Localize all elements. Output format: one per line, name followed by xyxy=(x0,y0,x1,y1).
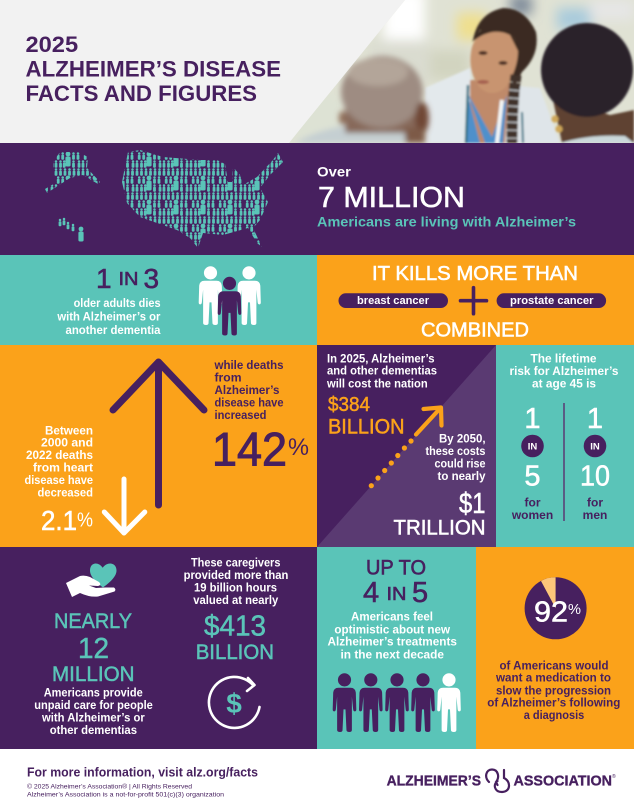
footer: more information: For more information, visit alz.org/facts xyxy=(27,765,258,780)
text: deaths increased: increased xyxy=(214,408,266,422)
text: caregiver hours xyxy=(184,556,288,607)
stat: 1 in 3: 1 xyxy=(96,263,112,294)
stat: nearly 12 million xyxy=(52,610,134,686)
title xyxy=(26,32,281,106)
icon: US map made of people xyxy=(45,150,283,248)
panel: 7 million Americans xyxy=(0,143,634,255)
stat: $1 trillion: TRILLION xyxy=(394,516,486,539)
text: heart disease decreased xyxy=(24,423,93,499)
pill: breast cancer xyxy=(338,293,448,308)
text: unpaid care: with Alzheimer’s or xyxy=(41,711,145,725)
title: FACTS AND FIGURES xyxy=(26,81,257,106)
text: want medication: want a medication to xyxy=(495,671,611,685)
face xyxy=(470,27,518,93)
text: 2050 cost xyxy=(426,431,486,483)
text: deaths increased: while deaths xyxy=(214,358,284,372)
text: want medication: of Alzheimer’s following xyxy=(487,696,620,710)
text: 2050 cost: to nearly xyxy=(438,469,486,483)
stat text: Over xyxy=(317,164,352,180)
chart: 92% pie: 92 xyxy=(534,597,568,629)
text: 2050 cost: these costs xyxy=(426,444,486,458)
stat: up to 4 in 5: 4 xyxy=(363,577,379,609)
panel: medication xyxy=(476,547,634,749)
icon: three people xyxy=(199,266,261,336)
text: unpaid care: other dementias xyxy=(50,723,137,737)
stat text: 7 MILLION xyxy=(318,182,465,214)
stat: 1 in 5 for women xyxy=(511,403,553,522)
stat: up to 4 in 5 xyxy=(363,556,428,609)
stat: nearly 12 million: NEARLY xyxy=(54,610,132,633)
stat: 1 in 10 for men: 1 xyxy=(587,403,603,435)
stat: 1 in 3: IN xyxy=(118,269,138,289)
text: caregiver hours: These caregivers xyxy=(191,556,281,570)
stat: up to 4 in 5: 5 xyxy=(412,577,428,609)
stat: $1 trillion: $1 xyxy=(459,488,486,520)
text: caregiver hours: valued at nearly xyxy=(193,593,279,607)
description: older adults dies xyxy=(74,296,161,310)
panel: it kills more than: IT KILLS MORE THAN xyxy=(372,263,578,285)
panel: cost xyxy=(317,345,496,547)
stat: $384 billion: $384 xyxy=(328,394,370,416)
description: with Alzheimer’s or xyxy=(56,310,161,324)
stat: 1 in 5 for women: women xyxy=(511,508,553,522)
stat: 142%: % xyxy=(288,434,309,461)
stat: 2.1%: 2.1 xyxy=(41,505,77,536)
stat: 1 in 10 for men: men xyxy=(583,508,607,522)
text: deaths increased: from xyxy=(214,371,242,385)
footer: more information: Alzheimer’s Association is a not-for-profit 501(c)(3) organization xyxy=(27,792,224,799)
arrow: down xyxy=(104,479,145,533)
chart: 92% pie xyxy=(525,577,587,639)
logo: Alzheimer's Association: ® xyxy=(612,773,616,780)
stat: nearly 12 million: 12 xyxy=(78,633,109,665)
text: lifetime risk: at age 45 is xyxy=(532,377,596,391)
stat: $384 billion xyxy=(328,394,404,438)
stat: up to 4 in 5: IN xyxy=(386,584,406,604)
logo: Alzheimer's Association: ALZHEIMER’S xyxy=(387,773,481,790)
text: deaths increased: disease have xyxy=(214,396,284,410)
text: optimistic: in the next decade xyxy=(340,647,444,661)
stat: 1 in 10 for men: 10 xyxy=(580,461,610,493)
text: 2025 cost: and other dementias xyxy=(327,364,437,378)
header background xyxy=(0,0,634,143)
text: want medication xyxy=(487,658,620,722)
text: lifetime risk xyxy=(510,351,619,391)
text: want medication: a diagnosis xyxy=(524,708,585,722)
text: deaths increased xyxy=(214,358,284,422)
description: another dementia xyxy=(66,323,161,337)
icon: dollar cycle xyxy=(209,677,260,728)
stat: 1 in 10 for men xyxy=(580,403,610,522)
panel: it kills more than xyxy=(317,255,634,345)
pill: breast cancer: breast cancer xyxy=(357,295,430,307)
description xyxy=(56,296,161,337)
text: 2025 cost: In 2025, Alzheimer’s xyxy=(327,351,435,365)
logo: Alzheimer's Association: ASSOCIATION xyxy=(514,773,612,790)
panel: caregivers xyxy=(0,547,317,749)
stat: 1 in 3 xyxy=(96,263,159,294)
text: unpaid care xyxy=(34,686,153,737)
text: 2025 cost xyxy=(326,351,437,390)
text: heart disease decreased: from heart xyxy=(33,461,93,475)
stat: $384 billion: BILLION xyxy=(328,415,404,438)
text: optimistic: optimistic about new xyxy=(334,622,451,636)
text: unpaid care: Americans provide xyxy=(44,686,143,700)
coat xyxy=(425,68,478,143)
stat: $1 trillion xyxy=(394,488,486,539)
text: 2050 cost: By 2050, xyxy=(439,431,486,445)
icon: five people xyxy=(333,673,461,732)
text: unpaid care: unpaid care for people xyxy=(34,698,153,712)
stat: 1 in 3: 3 xyxy=(144,263,159,294)
photo: doctor talking with patients xyxy=(280,0,634,143)
stat text xyxy=(317,164,576,230)
footer: more information: © 2025 Alzheimer’s Association® | All Rights Reserved xyxy=(27,783,192,791)
text: optimistic xyxy=(328,610,457,661)
icon: plus xyxy=(460,288,486,314)
arrow: up xyxy=(113,362,204,505)
pill: prostate cancer: prostate cancer xyxy=(510,295,594,307)
text: heart disease decreased: Between xyxy=(45,423,93,437)
stat: 2.1%: % xyxy=(77,510,93,532)
text: caregiver hours: provided more than xyxy=(184,568,288,582)
title: ALZHEIMER’S DISEASE xyxy=(26,57,281,82)
icon: hand holding heart xyxy=(66,563,116,597)
chart: 92% pie: % xyxy=(568,601,581,618)
stat: $413 billion xyxy=(196,611,274,664)
stat: 1 in 5 for women: for xyxy=(524,496,541,510)
stat: $413 billion: BILLION xyxy=(196,641,274,664)
stat: up to 4 in 5: UP TO xyxy=(366,556,426,579)
text: deaths increased: Alzheimer’s xyxy=(214,383,280,397)
stat: 1 in 10 for men: for xyxy=(587,496,603,510)
pill: prostate cancer xyxy=(497,293,606,308)
text: optimistic: Alzheimer’s treatments xyxy=(328,635,457,649)
stat text: Americans are living with Alzheimer’s xyxy=(317,214,576,230)
text: heart disease decreased: 2000 and xyxy=(41,436,93,450)
title: 2025 xyxy=(26,32,78,57)
braid xyxy=(512,75,516,143)
text: heart disease decreased: decreased xyxy=(38,485,93,499)
stat: 142%: 142 xyxy=(212,423,287,476)
text: want medication: slow the progression xyxy=(496,683,611,697)
stat: nearly 12 million: MILLION xyxy=(52,663,134,686)
panel: it kills more than: COMBINED xyxy=(421,319,529,341)
text: optimistic: Americans feel xyxy=(351,610,433,624)
text: heart disease decreased: 2022 deaths xyxy=(26,448,93,462)
stat: 1 in 10 for men: IN xyxy=(590,442,600,452)
panel: deaths comparison xyxy=(0,345,317,547)
text: 2025 cost: will cost the nation xyxy=(326,376,428,390)
panel: lifetime risk xyxy=(496,345,634,547)
neck and scrubs xyxy=(470,80,510,143)
logo: Alzheimer's Association xyxy=(387,770,616,792)
panel: optimism xyxy=(317,547,476,749)
panel: 1 in 3 xyxy=(0,255,317,345)
stat: 1 in 5 for women: 5 xyxy=(524,461,541,493)
stat: $413 billion: $413 xyxy=(204,611,266,643)
text: lifetime risk: The lifetime xyxy=(530,351,597,365)
icon: dollar cycle: $ xyxy=(226,688,242,719)
hair back xyxy=(473,8,537,85)
arrow: dotted rising cost xyxy=(369,408,442,488)
footer: more information xyxy=(27,765,258,799)
text: heart disease decreased: disease have xyxy=(24,473,93,487)
text: 2050 cost: could rise xyxy=(434,456,486,470)
stat: 1 in 5 for women: 1 xyxy=(524,403,541,435)
stat: 1 in 5 for women: IN xyxy=(528,442,537,452)
text: lifetime risk: risk for Alzheimer’s xyxy=(510,364,619,378)
text: want medication: of Americans would xyxy=(500,658,608,672)
text: caregiver hours: 19 billion hours xyxy=(194,581,277,595)
